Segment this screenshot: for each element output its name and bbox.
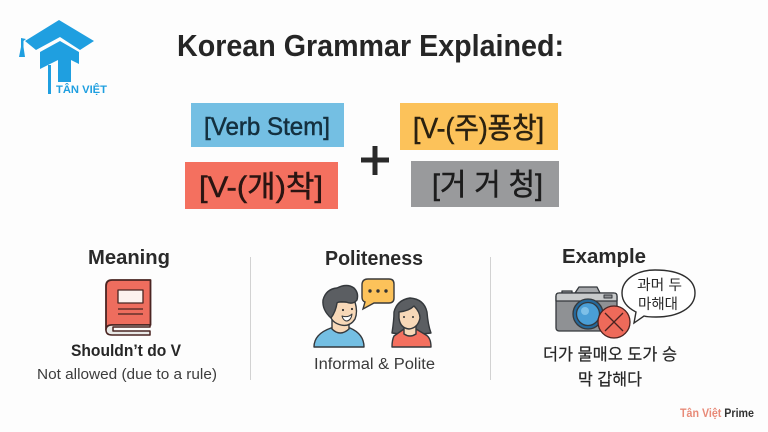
icon: red cross circle — [598, 306, 630, 338]
icon: camera — [556, 287, 617, 331]
block: 거 거 청 — [411, 161, 559, 207]
text: not allowed: Not allowed (due to a rule) — [37, 366, 217, 383]
formula blocks — [185, 103, 559, 209]
divider — [250, 257, 251, 380]
block: 거 거 청: [거 거 청] — [432, 169, 543, 202]
icon: speech bubble — [362, 279, 394, 309]
icon: book — [106, 280, 150, 335]
block: V-(주)퐁창: [V-(주)퐁창] — [413, 112, 544, 145]
icon: arrow — [40, 41, 79, 82]
heading: politeness: Politeness — [325, 248, 423, 270]
icon: logo bar — [48, 65, 51, 94]
block: V-(주)퐁창 — [400, 103, 558, 150]
text: example sentence line 2: 막 갑해다 — [578, 370, 642, 389]
icon: tassel — [19, 38, 26, 57]
heading: example: Example — [562, 246, 646, 268]
icon: graduation cap — [25, 20, 94, 50]
divider — [490, 257, 491, 380]
callout: speech bubble — [622, 270, 695, 323]
callout: speech bubble: 과머 두 — [637, 277, 682, 294]
plus sign — [361, 146, 389, 175]
block: verb stem — [191, 103, 344, 147]
panel: politeness — [314, 248, 435, 373]
block: V-(개)착 — [185, 162, 338, 209]
text: informal and polite: Informal & Polite — [314, 356, 435, 373]
text: shouldn't do V: Shouldn’t do V — [71, 342, 181, 360]
logo: Tan Viet — [19, 20, 107, 96]
panel: meaning — [37, 246, 217, 383]
icon: woman — [392, 298, 431, 347]
logo text: TÂN VIỆT — [56, 83, 107, 96]
title: Korean Grammar Explained: — [177, 28, 564, 63]
block: V-(개)착: [V-(개)착] — [199, 171, 323, 204]
callout: speech bubble: 마해대 — [638, 296, 678, 313]
panel: example — [543, 246, 695, 389]
block: verb stem: [Verb Stem] — [204, 113, 330, 141]
heading: meaning: Meaning — [88, 246, 170, 269]
icon: man — [314, 286, 364, 347]
footer brand: Tân Việt Prime — [680, 406, 754, 420]
text: example sentence line 1: 더가 물매오 도가 승 — [543, 345, 677, 364]
